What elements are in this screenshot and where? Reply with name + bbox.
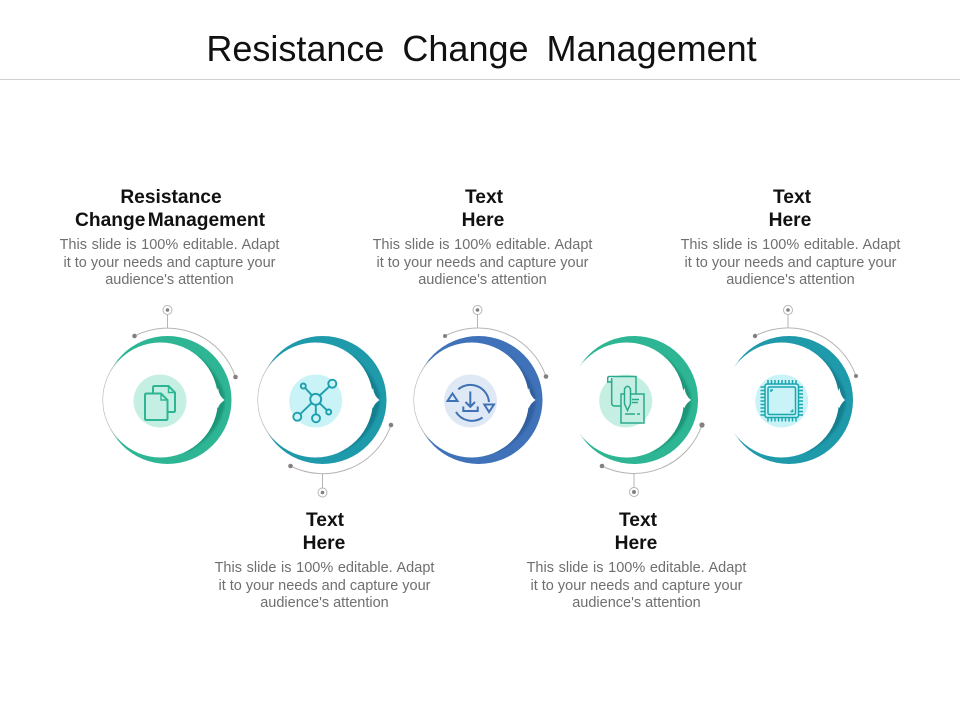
text block 3: audience's attention xyxy=(418,272,547,288)
text block 5: Text xyxy=(773,187,812,208)
text block 2: This slide is 100% editable. Adapt xyxy=(215,560,434,576)
text block 4 xyxy=(527,510,746,611)
step 2 ring xyxy=(258,336,386,464)
text block 3: Text xyxy=(465,187,504,208)
text block 1: audience's attention xyxy=(105,272,234,288)
text block 2: Here xyxy=(303,533,346,554)
step 4 ring xyxy=(566,336,698,464)
text block 2 xyxy=(215,510,434,611)
text block 2: it to your needs and capture your xyxy=(218,578,431,594)
step 1 connector arc xyxy=(132,306,238,379)
step 4 icon: contract xyxy=(599,374,652,428)
text block 4: Here xyxy=(615,533,658,554)
text block 2: audience's attention xyxy=(260,595,389,611)
step 3 ring xyxy=(414,336,542,464)
text block 1: it to your needs and capture your xyxy=(64,255,276,271)
step 1 icon: documents xyxy=(134,374,186,428)
text block 4: Text xyxy=(619,510,658,531)
text block 5: it to your needs and capture your xyxy=(684,255,897,271)
text block 1: Resistance xyxy=(120,187,222,208)
text block 4: it to your needs and capture your xyxy=(530,578,743,594)
text block 5: audience's attention xyxy=(726,272,855,288)
text block 4: audience's attention xyxy=(572,595,701,611)
text block 3 xyxy=(373,187,592,288)
step 5 ring xyxy=(721,336,853,464)
text block 3: it to your needs and capture your xyxy=(376,255,589,271)
step 1 ring xyxy=(103,336,231,464)
step 3 connector arc xyxy=(443,306,548,379)
step 2 icon: network xyxy=(289,374,342,428)
step 3 icon: sync download xyxy=(444,374,497,428)
text block 1: Change Management xyxy=(75,210,266,231)
step 2 connector arc xyxy=(288,423,393,497)
text block 2: Text xyxy=(306,510,345,531)
text block 4: This slide is 100% editable. Adapt xyxy=(527,560,746,576)
text block 3: Here xyxy=(462,210,505,231)
text block 5 xyxy=(681,187,900,288)
text block 3: This slide is 100% editable. Adapt xyxy=(373,237,592,253)
title: Resistance Change Management xyxy=(206,28,757,69)
step 5 icon: chip xyxy=(755,374,808,428)
text block 1 xyxy=(60,187,279,288)
step 5 connector arc xyxy=(753,306,858,378)
step 4 connector arc xyxy=(600,422,705,496)
text block 1: This slide is 100% editable. Adapt xyxy=(60,237,279,253)
text block 5: This slide is 100% editable. Adapt xyxy=(681,237,900,253)
text block 5: Here xyxy=(769,210,812,231)
